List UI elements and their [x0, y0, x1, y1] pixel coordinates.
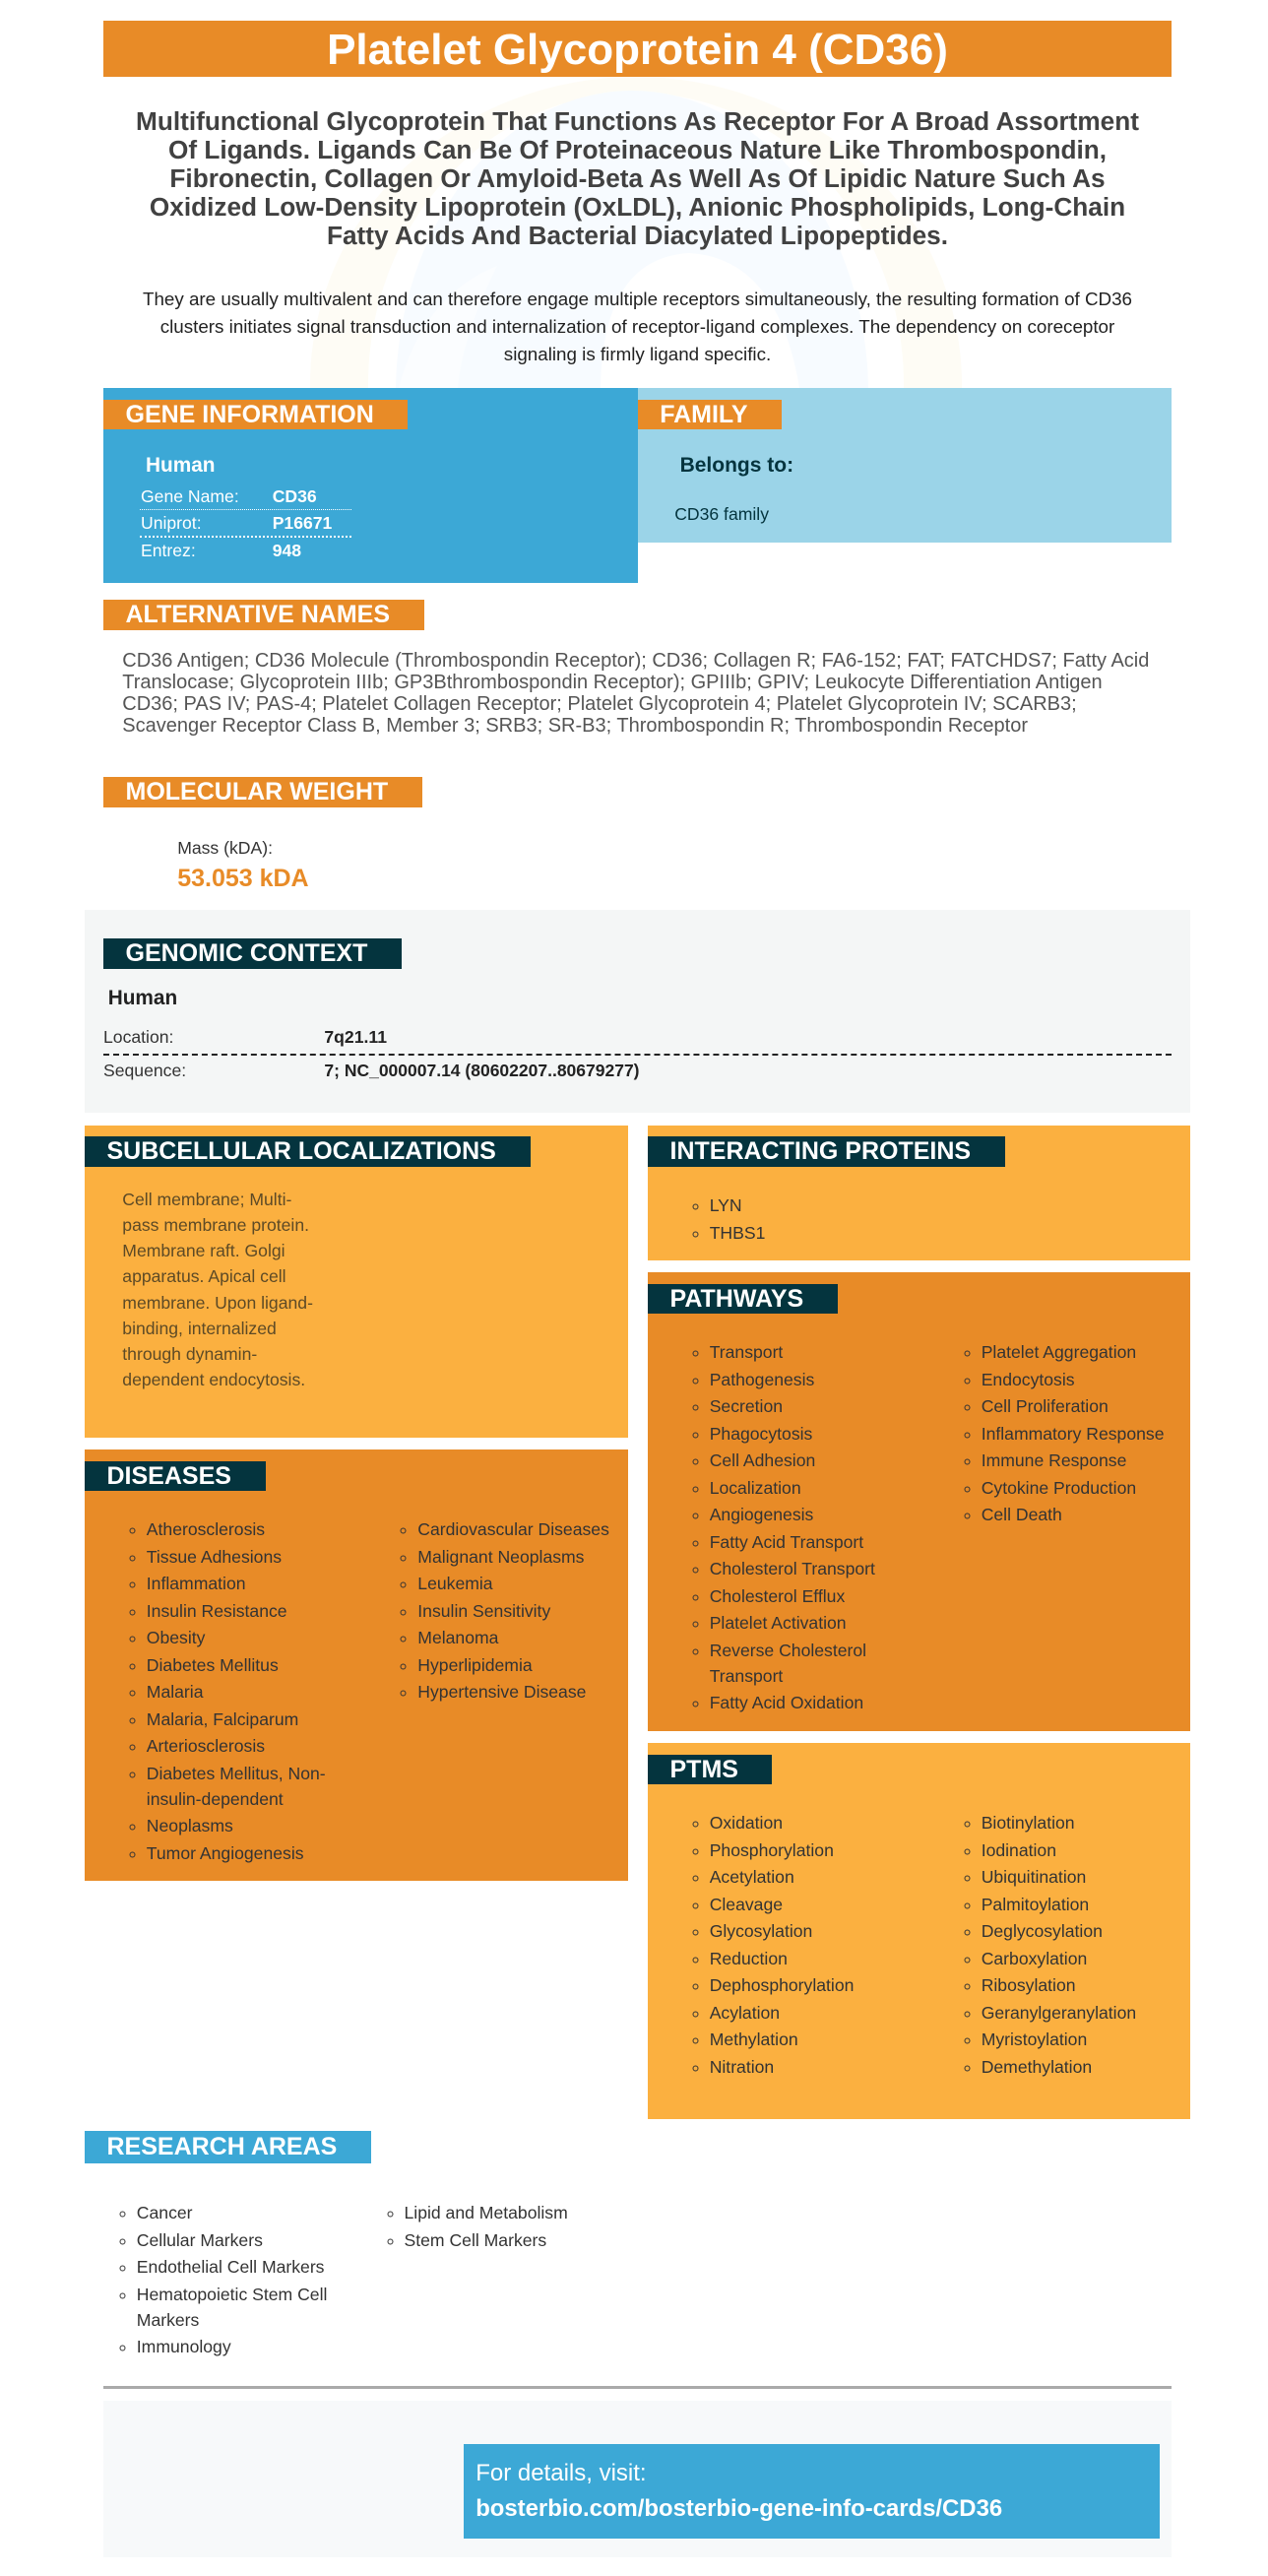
disease list column 2 — [400, 1519, 609, 1702]
pathway list column 1: Fatty Acid Transport — [710, 1532, 863, 1552]
research list column 1: Markers — [137, 2310, 199, 2330]
heading: research areas — [85, 2131, 371, 2163]
pathway list column 1: Localization — [710, 1477, 801, 1497]
pathway list column 2: Endocytosis — [982, 1369, 1075, 1388]
panel: subcellular localizations — [85, 1126, 628, 1438]
pathway list column 1: Phagocytosis — [710, 1424, 812, 1444]
pathway list column 1: Transport — [710, 1666, 783, 1686]
research list column 1: Immunology — [137, 2337, 231, 2356]
sequence row: Sequence: — [103, 1061, 186, 1080]
PTM list column 2: Biotinylation — [982, 1813, 1075, 1833]
disease list column 1: Malaria, Falciparum — [147, 1709, 298, 1729]
protein list — [693, 1195, 765, 1243]
disease list column 2: Malignant Neoplasms — [417, 1546, 584, 1566]
research list column 2: Stem Cell Markers — [404, 2229, 546, 2249]
disease list column 1: Tissue Adhesions — [147, 1546, 282, 1566]
belongs to label: Belongs to: — [680, 454, 793, 477]
disease list column 2: Hypertensive Disease — [417, 1682, 586, 1702]
pathway list column 1: Reverse Cholesterol — [710, 1641, 866, 1660]
alternative names text: CD36 Antigen; CD36 Molecule (Thrombospondin Receptor); CD36; Collagen R; FA6-152; FAT; FATCHDS7; Fatty Acid — [122, 650, 1149, 672]
PTM list column 2: Carboxylation — [982, 1948, 1087, 1967]
pathway list column 1 — [693, 1342, 875, 1712]
pathway list column 2: Immune Response — [982, 1450, 1126, 1470]
disease list column 1: Tumor Angiogenesis — [147, 1843, 304, 1863]
gene table: P16671 — [273, 513, 332, 533]
PTM list column 1: Dephosphorylation — [710, 1975, 854, 1995]
research list column 1: Cancer — [137, 2203, 193, 2222]
panel: diseases — [85, 1449, 628, 1881]
PTM list column 2: Myristoylation — [982, 2029, 1087, 2049]
disease list column 2: Melanoma — [417, 1628, 498, 1647]
pathway list column 1: Cell Adhesion — [710, 1450, 815, 1470]
localization text: binding, internalized — [122, 1319, 277, 1338]
disease list column 1: Insulin Resistance — [147, 1601, 287, 1621]
summary heading: Multifunctional Glycoprotein That Functions As Receptor For A Broad Assortment — [136, 106, 1139, 136]
localization text: apparatus. Apical cell — [122, 1266, 286, 1286]
callout: details link: bosterbio.com/bosterbio-gene-info-cards/CD36 — [476, 2495, 1002, 2522]
PTM list column 2: Ubiquitination — [982, 1867, 1086, 1887]
research list column 1: Cellular Markers — [137, 2229, 263, 2249]
research list column 2: Lipid and Metabolism — [404, 2203, 568, 2222]
alternative names text — [122, 650, 1149, 737]
panel: PTMs — [648, 1743, 1190, 2119]
summary body text: They are usually multivalent and can therefore engage multiple receptors simultaneously, the resulting formation of CD36 — [143, 289, 1132, 309]
PTM list column 1: Acetylation — [710, 1867, 794, 1887]
PTM list column 1: Glycosylation — [710, 1921, 812, 1941]
PTM list column 2: Ribosylation — [982, 1975, 1076, 1995]
localization text — [122, 1190, 313, 1389]
localization text: pass membrane protein. — [122, 1215, 309, 1235]
protein list: LYN — [710, 1195, 742, 1215]
panel: genomic context: 7q21.11 — [324, 1027, 387, 1047]
pathway list column 2: Cell Proliferation — [982, 1396, 1109, 1416]
disease list column 1: Atherosclerosis — [147, 1519, 265, 1539]
disease list column 1: Malaria — [147, 1682, 203, 1702]
pathway list column 1: Cholesterol Efflux — [710, 1585, 845, 1605]
gene table: 948 — [273, 541, 301, 560]
heading: diseases — [85, 1461, 266, 1491]
PTM list column 1: Nitration — [710, 2056, 774, 2076]
panel: pathways — [648, 1272, 1190, 1731]
disease list column 1: Obesity — [147, 1628, 205, 1647]
mass value: 53.053 kDA — [177, 865, 309, 892]
PTM list column 1: Reduction — [710, 1948, 788, 1967]
gene table: Entrez: — [141, 541, 196, 560]
heading: pathways: PATHWAYS — [669, 1285, 803, 1313]
summary heading: Fatty Acids And Bacterial Diacylated Lipopeptides. — [327, 221, 948, 250]
heading: alternative names: ALTERNATIVE NAMES — [126, 601, 390, 628]
alternative names text: Translocase; Glycoprotein IIIb; GP3Bthrombospondin Receptor); GPIIIb; GPIV; Leukocyte Differentiation Antigen — [122, 672, 1103, 693]
panel: footer — [103, 2401, 1172, 2557]
gene table: CD36 — [273, 486, 317, 506]
gene table — [140, 486, 351, 560]
localization text: through dynamin- — [122, 1344, 257, 1364]
panel: family — [638, 388, 1172, 543]
pathway list column 1: Transport — [710, 1342, 783, 1362]
PTM list column 2: Deglycosylation — [982, 1921, 1103, 1941]
heading: interacting proteins: INTERACTING PROTEINS — [669, 1137, 971, 1165]
disease list column 1: insulin-dependent — [147, 1788, 284, 1808]
panel: gene information — [103, 388, 638, 583]
pathway list column 1: Secretion — [710, 1396, 783, 1416]
disease list column 1: Diabetes Mellitus, Non- — [147, 1763, 326, 1782]
disease list column 1: Diabetes Mellitus — [147, 1654, 279, 1674]
disease list column 2: Insulin Sensitivity — [417, 1601, 550, 1621]
research list column 1: Hematopoietic Stem Cell — [137, 2285, 327, 2304]
PTM list column 2: Demethylation — [982, 2056, 1092, 2076]
pathway list column 2: Platelet Aggregation — [982, 1342, 1136, 1362]
PTM list column 2 — [965, 1813, 1136, 2076]
heading: gene information: GENE INFORMATION — [126, 401, 374, 428]
disease list column 2: Leukemia — [417, 1574, 493, 1593]
pathway list column 2: Inflammatory Response — [982, 1424, 1164, 1444]
summary heading: Fibronectin, Collagen Or Amyloid-Beta As Well As Of Lipidic Nature Such As — [169, 163, 1106, 193]
title banner: Platelet Glycoprotein 4 (CD36) — [327, 26, 948, 74]
pathway list column 1: Fatty Acid Oxidation — [710, 1693, 863, 1712]
PTM list column 1 — [693, 1813, 854, 2076]
disease list column 2: Hyperlipidemia — [417, 1654, 533, 1674]
heading: family — [638, 400, 782, 429]
localization text: membrane. Upon ligand- — [122, 1293, 313, 1313]
disease list column 1 — [130, 1519, 326, 1863]
protein list: THBS1 — [710, 1223, 765, 1243]
footer divider — [103, 2386, 1172, 2389]
alternative names text: CD36; PAS IV; PAS-4; Platelet Collagen Receptor; Platelet Glycoprotein 4; Platelet Glycoprotein IV; SCARB3; — [122, 693, 1077, 715]
gene table: Uniprot: — [141, 513, 202, 533]
PTM list column 2: Iodination — [982, 1839, 1056, 1859]
title banner — [103, 21, 1172, 77]
PTM list column 1: Methylation — [710, 2029, 798, 2049]
pathway list column 1: Platelet Activation — [710, 1613, 847, 1633]
research list column 1: Endothelial Cell Markers — [137, 2257, 324, 2277]
gene table: Gene Name: — [141, 486, 239, 506]
PTM list column 1: Phosphorylation — [710, 1839, 834, 1859]
species label: Human — [146, 454, 215, 477]
localization text: dependent endocytosis. — [122, 1370, 305, 1389]
disease list column 1: Inflammation — [147, 1574, 246, 1593]
background watermark logo — [310, 77, 962, 388]
heading: diseases: DISEASES — [106, 1462, 231, 1490]
summary body text: clusters initiates signal transduction and internalization of receptor-ligand complexes. The dependency on coreceptor — [160, 316, 1114, 337]
callout: details link — [464, 2444, 1160, 2539]
localization text: Membrane raft. Golgi — [122, 1241, 285, 1260]
pathway list column 1: Angiogenesis — [710, 1505, 813, 1524]
summary body text: signaling is firmly ligand specific. — [504, 344, 771, 364]
panel: interacting proteins — [648, 1126, 1190, 1260]
panel: genomic context — [85, 910, 1190, 1113]
disease list column 2: Cardiovascular Diseases — [417, 1519, 609, 1539]
summary body text — [143, 289, 1132, 364]
summary heading: Of Ligands. Ligands Can Be Of Proteinaceous Nature Like Thrombospondin, — [168, 135, 1107, 164]
disease list column 1: Arteriosclerosis — [147, 1736, 265, 1756]
heading: research areas: RESEARCH AREAS — [106, 2133, 337, 2160]
callout: details link: For details, visit: — [476, 2460, 647, 2486]
PTM list column 2: Geranylgeranylation — [982, 2003, 1136, 2023]
research list column 1 — [120, 2203, 327, 2356]
mass label: Mass (kDA): — [177, 838, 273, 858]
research list column 2 — [388, 2203, 568, 2249]
species label: Human — [108, 987, 177, 1009]
heading: family: FAMILY — [660, 401, 748, 428]
heading: pathways — [648, 1284, 838, 1314]
pathway list column 2: Cell Death — [982, 1505, 1062, 1524]
PTM list column 2: Palmitoylation — [982, 1895, 1089, 1914]
heading: genomic context: GENOMIC CONTEXT — [126, 939, 367, 967]
location row: Location: — [103, 1027, 173, 1047]
pathway list column 2 — [965, 1342, 1164, 1524]
pathway list column 1: Pathogenesis — [710, 1369, 814, 1388]
panel: genomic context: 7; NC_000007.14 (80602207..80679277) — [324, 1061, 640, 1080]
PTM list column 1: Cleavage — [710, 1895, 783, 1914]
PTM list column 1: Oxidation — [710, 1813, 783, 1833]
family name: CD36 family — [674, 504, 769, 524]
summary heading: Oxidized Low-Density Lipoprotein (OxLDL), Anionic Phospholipids, Long-Chain — [150, 192, 1125, 222]
PTM list column 1: Acylation — [710, 2003, 780, 2023]
summary heading — [136, 106, 1139, 250]
heading: PTMs: PTMS — [669, 1756, 738, 1783]
heading: molecular weight: MOLECULAR WEIGHT — [126, 778, 388, 805]
heading: subcellular localizations: SUBCELLULAR LOCALIZATIONS — [106, 1137, 496, 1165]
disease list column 1: Neoplasms — [147, 1816, 233, 1835]
pathway list column 2: Cytokine Production — [982, 1477, 1136, 1497]
heading: PTMs — [648, 1755, 772, 1784]
localization text: Cell membrane; Multi- — [122, 1190, 291, 1209]
alternative names text: Scavenger Receptor Class B, Member 3; SRB3; SR-B3; Thrombospondin R; Thrombospondin Receptor — [122, 715, 1028, 737]
pathway list column 1: Cholesterol Transport — [710, 1559, 875, 1578]
